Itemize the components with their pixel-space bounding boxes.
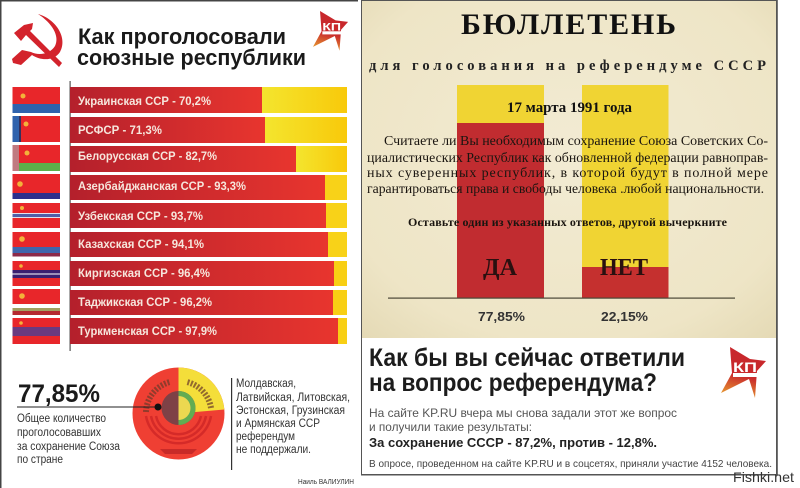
- bar: Tajikistan: [70, 290, 347, 315]
- poll heading: Как бы вы сейчас ответили: [369, 344, 685, 372]
- baseline: [388, 298, 735, 299]
- ballot question: циалистических Республик как обновленной федерации равноправ-: [367, 151, 768, 166]
- flag: Azerbaijan: [12, 174, 60, 199]
- poll heading: [369, 344, 685, 397]
- flag: RSFSR: [12, 116, 60, 142]
- ballot subheading: для голосования на референдуме СССР: [369, 58, 766, 74]
- bar: Kyrgyzstan: Киргизская ССР - 96,4%: [78, 268, 210, 280]
- poll intro text: и получили такие результаты:: [369, 420, 532, 434]
- bar: no: [582, 85, 668, 298]
- value: yes: 77,85%: [478, 309, 525, 324]
- bar: Kazakhstan: Казахская ССР - 94,1%: [78, 239, 204, 251]
- bar: RSFSR: РСФСР - 71,3%: [78, 125, 162, 137]
- flag: Kazakhstan: [12, 232, 60, 256]
- icon: KP logo top: КП: [322, 22, 341, 34]
- bar: Azerbaijan: [70, 175, 347, 200]
- total description: [17, 413, 121, 466]
- panel: online poll: [361, 338, 777, 474]
- bar: Uzbekistan: [70, 203, 347, 228]
- bar chart: [70, 87, 347, 344]
- bar: Turkmenistan: Туркменская ССР - 97,9%: [78, 326, 217, 338]
- bar: RSFSR: [70, 117, 347, 143]
- total description: Общее количество: [17, 413, 106, 425]
- divider and non-voting republics text: не поддержали.: [236, 444, 311, 456]
- ballot question: ных суверенных республик, в которой будут в полной мере: [367, 166, 768, 181]
- poll intro text: [369, 406, 677, 434]
- flag: Kyrgyzstan: [12, 261, 60, 286]
- bar: yes: [457, 85, 544, 298]
- total description: за сохранение Союза: [17, 441, 121, 453]
- label: no: НЕТ: [600, 255, 648, 281]
- title: союзные республики: [77, 45, 306, 70]
- panel: ballot: [361, 0, 777, 338]
- divider and non-voting republics text: Молдавская,: [236, 378, 296, 390]
- total percentage: 77,85%: [18, 380, 100, 408]
- divider and non-voting republics text: Эстонская, Грузинская: [236, 405, 345, 417]
- flag: Uzbekistan: [12, 203, 60, 228]
- label: yes: ДА: [483, 255, 518, 281]
- flag: Turkmenistan: [12, 318, 60, 344]
- ballot question: гарантироваться права и свободы человека .любой национальности.: [367, 182, 764, 197]
- ballot heading: БЮЛЛЕТЕНЬ: [461, 8, 676, 41]
- bar: Ukraine: Украинская ССР - 70,2%: [78, 96, 211, 108]
- icon: KP logo top: [313, 11, 348, 51]
- flag: Tajikistan: [12, 289, 60, 315]
- divider and non-voting republics text: референдум: [236, 431, 295, 443]
- bar: Uzbekistan: Узбекская ССР - 93,7%: [78, 211, 203, 223]
- bar: Ukraine: [70, 87, 347, 113]
- axis line: [70, 81, 71, 351]
- value: no: 22,15%: [601, 309, 648, 324]
- pie chart: emblem: [132, 368, 224, 460]
- credit: Наиль ВАЛИУЛИН: [298, 479, 354, 486]
- bar: Turkmenistan: [70, 318, 347, 344]
- watermark: Fishki.net: [733, 469, 794, 485]
- bar: Kazakhstan: [70, 232, 347, 257]
- panel: union republics vote: [0, 0, 358, 488]
- icon: KP logo bottom: КП: [733, 359, 757, 375]
- poll footnote: В опросе, проведенном на сайте KP.RU и в соцсетях, приняли участие 4152 человека.: [369, 458, 772, 470]
- poll result: За сохранение СССР - 87,2%, против - 12,8%.: [369, 435, 657, 450]
- title: Как проголосовали: [78, 24, 286, 49]
- ballot question: Считаете ли Вы необходимым сохранение Союза Советских Со-: [384, 134, 768, 149]
- ballot question: [367, 134, 768, 197]
- bar: Azerbaijan: Азербайджанская ССР - 93,3%: [78, 181, 246, 193]
- poll heading: на вопрос референдума?: [369, 369, 657, 397]
- icon: hammer and sickle: [12, 14, 63, 67]
- divider and non-voting republics text: [231, 378, 350, 470]
- ballot instruction: Оставьте один из указанных ответов, другой вычеркните: [408, 215, 728, 229]
- divider and non-voting republics text: Латвийская, Литовская,: [236, 392, 350, 404]
- bar: Belarus: [70, 146, 347, 172]
- total description: проголосовавших: [17, 427, 101, 439]
- callout line with dot: [17, 404, 162, 410]
- ballot date: 17 марта 1991 года: [507, 100, 633, 116]
- poll intro text: На сайте KP.RU вчера мы снова задали этот же вопрос: [369, 406, 677, 420]
- flag: Belarus: [12, 145, 60, 171]
- bar: Belarus: Белорусская ССР - 82,7%: [78, 151, 217, 163]
- icon: KP logo bottom: [721, 347, 766, 398]
- title: [77, 24, 306, 70]
- bar: Kyrgyzstan: [70, 261, 347, 286]
- divider and non-voting republics text: и Армянская ССР: [236, 418, 320, 430]
- ballot frame: [361, 0, 778, 476]
- total description: по стране: [17, 454, 63, 466]
- bar: Tajikistan: Таджикская ССР - 96,2%: [78, 297, 212, 309]
- flag: Ukraine: [12, 87, 60, 113]
